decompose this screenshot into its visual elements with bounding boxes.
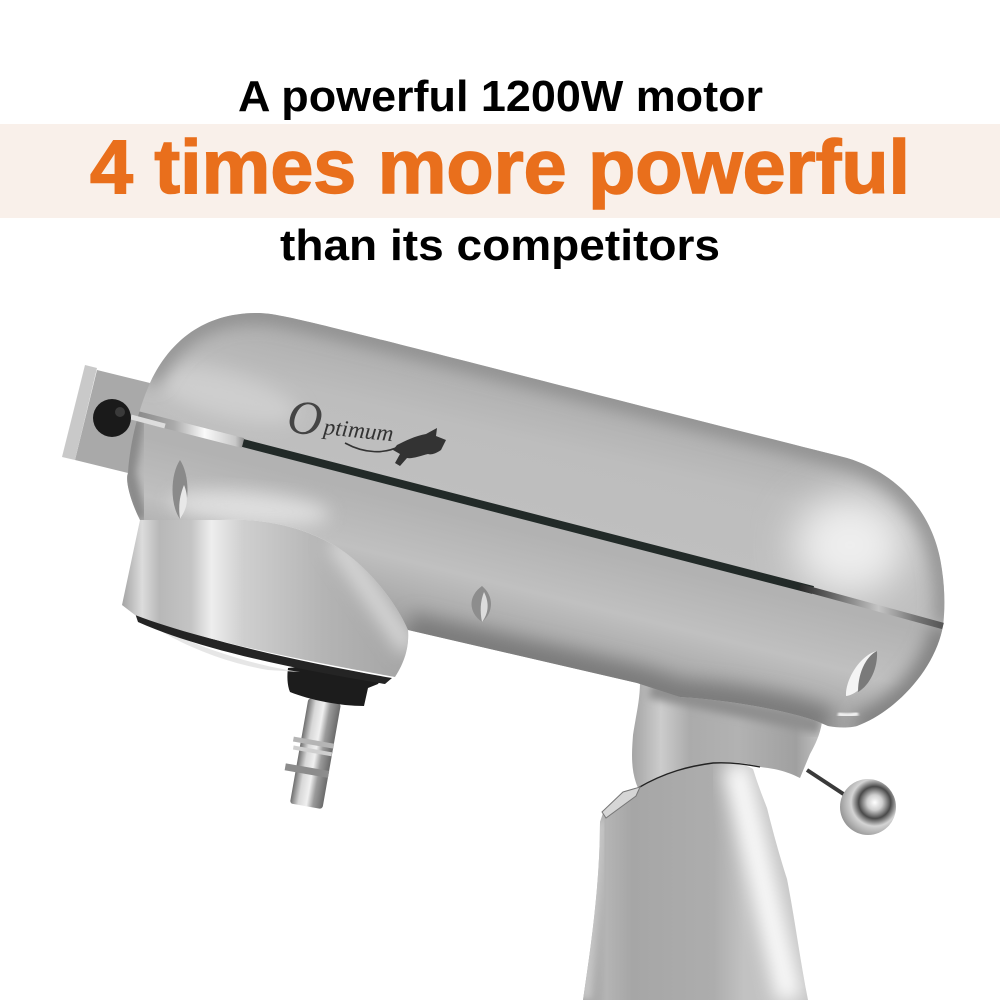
beater shaft (285, 698, 341, 809)
metal band: left (137, 416, 243, 443)
head lower half (120, 410, 950, 740)
mixer base column (580, 760, 820, 1000)
pale underside (145, 620, 300, 672)
heading: line 3: than its competitors (280, 221, 720, 270)
vent: right (846, 651, 877, 696)
nose housing (122, 520, 408, 677)
highlight band (0, 124, 1000, 218)
front hub (62, 365, 165, 473)
heading: line 1: A powerful 1200W motor (238, 72, 763, 121)
logo: O (285, 390, 325, 447)
heading: line 2: 4 times more powerful (90, 125, 910, 210)
neck split line (638, 763, 760, 788)
screw hole: centre (472, 586, 491, 622)
logo (285, 390, 446, 466)
black cap (287, 667, 382, 706)
metal band: right (800, 587, 943, 626)
head upper half (130, 305, 950, 635)
neck (632, 684, 826, 788)
logo: ptimum (320, 414, 395, 446)
dark band line (243, 443, 813, 590)
lock lever (807, 770, 896, 835)
vent: left (172, 460, 188, 519)
hinge strip (602, 787, 640, 818)
black ring under nose (135, 613, 392, 684)
logo swoosh (345, 443, 400, 452)
logo kangaroo (393, 428, 446, 466)
stand mixer illustration (62, 305, 950, 1000)
